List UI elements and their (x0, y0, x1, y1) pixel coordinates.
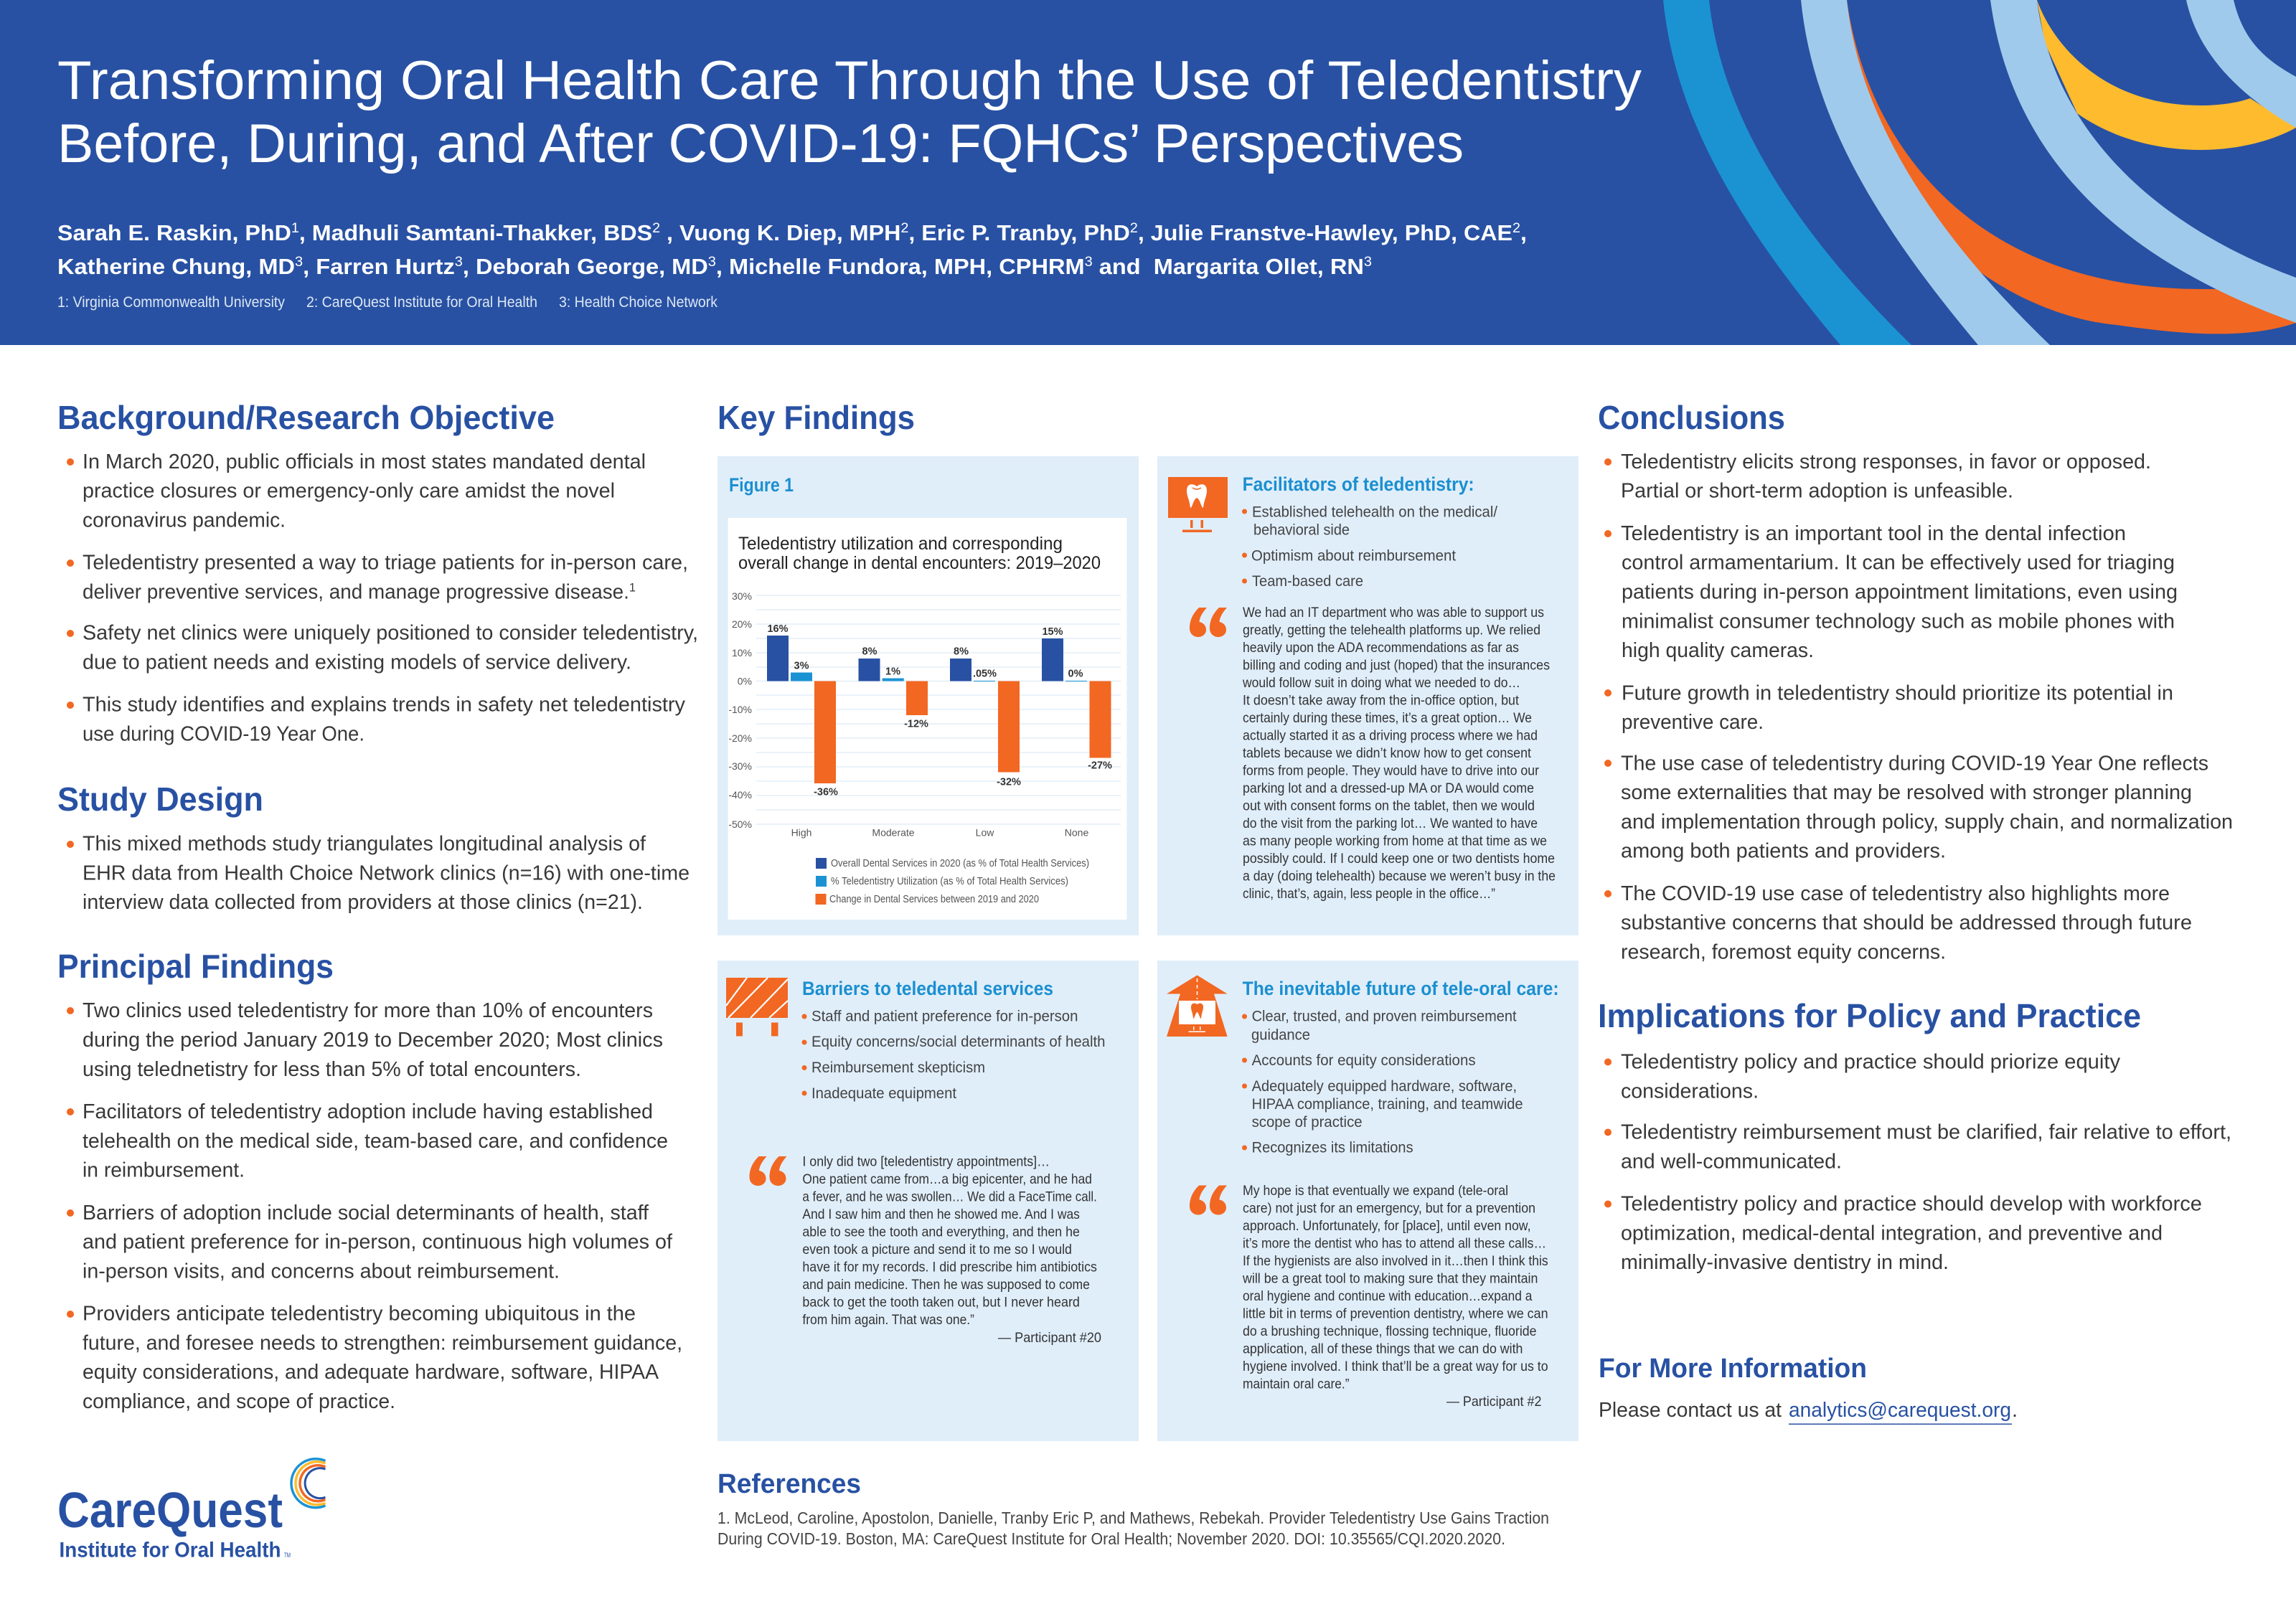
quote text: future: it’s more the dentist who has to attend all these calls… (1243, 1235, 1546, 1251)
quote text: barriers: from him again. That was one.” (802, 1312, 974, 1328)
bullet list: conclusions: Future growth in teledentistry should prioritize its potential in (1622, 681, 2173, 704)
legend: Overall Dental Services in 2020 (as % of Total Health Services) (831, 858, 1089, 869)
quote text: barriers: able to see the tooth and everything, and then he (802, 1224, 1080, 1240)
authors: 3 (1364, 255, 1372, 270)
quote text: facilitators: possibly could. If I could keep one or two dentists home (1243, 851, 1555, 867)
authors: 1 (291, 221, 299, 236)
bars: none (1042, 626, 1112, 772)
bullet list: conclusions: The COVID-19 use case of teledentistry also highlights more (1621, 882, 2170, 905)
y axis labels: -30% (728, 760, 752, 772)
bullet list: principal findings: Two clinics used teledentistry for more than 10% of encounters (83, 999, 653, 1022)
affiliations: 1: Virginia Commonwealth University (57, 294, 285, 311)
quote text: future: — Participant #2 (1446, 1394, 1541, 1410)
quote text: future: little bit in terms of prevention dentistry, where we can (1243, 1306, 1548, 1321)
bars: moderate: 8% (862, 646, 878, 657)
affiliations (57, 294, 718, 311)
section: implications (1598, 997, 2231, 1274)
section: conclusions (1598, 399, 2233, 964)
quote text: future: My hope is that eventually we expand (tele-oral (1243, 1183, 1508, 1199)
bullet list: principal findings: telehealth on the medical side, team-based care, and confidence (83, 1130, 668, 1153)
quote text: future: application, all of these things that we can do with (1243, 1341, 1523, 1357)
bars: none: -27% (1088, 760, 1112, 772)
bullet list: barriers: Inadequate equipment (811, 1085, 956, 1102)
bullet list: implications: and well-communicated. (1621, 1150, 1842, 1173)
bars: low (950, 646, 1021, 788)
bullet list: principal findings: equity considerations, and adequate hardware, software, HIPAA (83, 1361, 659, 1384)
bullet list: facilitators: behavioral side (1253, 522, 1350, 539)
quote text: future: hygiene involved. I think that’ll be a great way for us to (1243, 1359, 1548, 1374)
bullet list: facilitators: Team-based care (1252, 573, 1363, 590)
section: references (718, 1469, 1549, 1548)
bullet list: conclusions: The use case of teledentistry during COVID-19 Year One reflects (1621, 752, 2208, 775)
bullet list: barriers: Equity concerns/social determinants of health (811, 1034, 1105, 1050)
icon: quotation mark (749, 1156, 786, 1186)
affiliations: 3: Health Choice Network (559, 294, 718, 311)
quote text: facilitators: a day (doing telehealth) because we weren’t busy in the (1243, 868, 1556, 884)
logo: CareQuest: TM (284, 1552, 291, 1559)
bars: high: 3% (794, 660, 809, 671)
quote text: facilitators: do the visit from the parking lot… We wanted to have (1243, 816, 1538, 831)
legend: % Teledentistry Utilization (as % of Total Health Services) (831, 876, 1068, 887)
title: Before, During, and After COVID-19: FQHCs’ Perspectives (57, 113, 1464, 174)
bullet list: conclusions: Teledentistry is an important tool in the dental infection (1621, 522, 2126, 545)
quote text: future: will be a great tool to making sure that they maintain (1242, 1271, 1538, 1287)
section: study design (57, 780, 690, 914)
legend: Change in Dental Services between 2019 and 2020 (829, 894, 1039, 905)
bullet list: implications: considerations. (1621, 1080, 1759, 1103)
bullet list: implications: minimally-invasive dentistry in mind. (1621, 1251, 1949, 1274)
chart title: Teledentistry utilization and corresponding (738, 534, 1063, 554)
panel: figure 1 (718, 456, 1139, 935)
heading: study design: Study Design (57, 780, 263, 818)
icon: road barrier (726, 978, 788, 1036)
bullet list: principal findings: Facilitators of teledentistry adoption include having established (83, 1100, 653, 1123)
quote text: facilitators: parking lot and a dressed-up MA or DA would come (1243, 780, 1534, 796)
quote text: barriers: One patient came from…a big epicenter, and he had (802, 1171, 1092, 1187)
authors: , Vuong K. Diep, MPH (660, 220, 900, 245)
heading: key findings: Key Findings (718, 399, 915, 436)
y axis labels: 10% (732, 647, 752, 659)
logo: CareQuest: Institute for Oral Health (59, 1538, 281, 1562)
heading: barriers: Barriers to teledental services (802, 978, 1053, 999)
bullet list: background: This study identifies and explains trends in safety net teledentistry (83, 694, 685, 717)
logo: CareQuest (57, 1459, 326, 1562)
quote text: facilitators: actually started it as a driving process where we had (1243, 727, 1538, 743)
bullet list: conclusions: substantive concerns that should be addressed through future (1621, 912, 2192, 935)
quote text: barriers: — Participant #20 (998, 1330, 1101, 1346)
bullet list: principal findings: during the period January 2019 to December 2020; Most clinics (83, 1029, 663, 1052)
bullet list: background: coronavirus pandemic. (83, 509, 286, 532)
bullet list: future: Recognizes its limitations (1252, 1140, 1413, 1156)
icon: quotation mark (1190, 608, 1227, 637)
title (57, 50, 1642, 174)
bullet list: principal findings: in reimbursement. (83, 1159, 245, 1182)
y axis labels: 0% (738, 676, 752, 687)
bullet list: background: deliver preventive services, and manage progressive disease. (83, 581, 651, 604)
x axis labels: Moderate (872, 826, 915, 838)
authors: 3 (295, 255, 303, 270)
quote text: barriers: a fever, and he was swollen… We did a FaceTime call. (802, 1189, 1097, 1204)
panel: future of tele-oral care (1157, 961, 1578, 1441)
logo: CareQuest: CareQuest (57, 1482, 283, 1538)
quote text: facilitators: would follow suit in doing what we needed to do… (1242, 675, 1520, 691)
bullet list: facilitators: Established telehealth on the medical/ (1252, 504, 1497, 521)
bullet list: conclusions: preventive care. (1622, 711, 1764, 734)
bullet list: background: Safety net clinics were uniquely positioned to consider teledentistry, (83, 622, 698, 645)
authors: , Julie Franstve-Hawley, PhD, CAE (1138, 220, 1512, 245)
bullet list: future: Accounts for equity considerations (1252, 1052, 1476, 1069)
bullet list: background: practice closures or emergency-only care amidst the novel (83, 480, 615, 503)
bullet list: barriers (802, 1009, 1105, 1102)
section: background/research objective (57, 399, 698, 745)
bullet list: principal findings: compliance, and scope of practice. (83, 1390, 395, 1413)
y axis labels: 30% (732, 590, 752, 602)
authors: 3 (455, 255, 463, 270)
y axis labels: 20% (732, 618, 752, 630)
bullet list: principal findings: future, and foresee needs to strengthen: reimbursement guidance, (83, 1331, 682, 1354)
quote text: facilitators: forms from people. They would have to drive into our (1243, 763, 1539, 779)
quote text: facilitators: as many people working from home at that time as we (1243, 834, 1547, 849)
quote text: facilitators: It doesn’t take away from the in-office option, but (1243, 693, 1520, 709)
decorative arcs (1663, 0, 2296, 345)
bullet list: conclusions: Teledentistry elicits strong responses, in favor or opposed. (1621, 450, 2151, 473)
bars: high: -36% (814, 786, 838, 798)
bullet list: future: Adequately equipped hardware, software, (1252, 1078, 1517, 1095)
authors: 3 (708, 255, 716, 270)
panel: facilitators (1157, 456, 1578, 935)
y axis labels: -40% (728, 789, 752, 801)
quote text: future: If the hygienists are also involved in it…then I think this (1243, 1253, 1548, 1269)
authors: , Eric P. Tranby, PhD (908, 220, 1130, 245)
quote text: barriers (802, 1153, 1101, 1346)
quote text: facilitators: out with consent forms on the tablet, then we would (1243, 798, 1535, 813)
bullet list: conclusions: control armamentarium. It can be effectively used for triaging (1622, 552, 2175, 575)
bullet list: study design: EHR data from Health Choice Network clinics (n=16) with one-time (83, 862, 690, 884)
x axis labels: Low (976, 826, 994, 838)
bullet list: study design (67, 832, 690, 914)
chart title: overall change in dental encounters: 2019–2020 (738, 553, 1101, 573)
contact line: analytics@carequest.org (1789, 1399, 2011, 1422)
bullet list: study design: interview data collected from providers at those clinics (n=21). (83, 891, 643, 914)
bullet list: implications: Teledentistry policy and practice should develop with workforce (1621, 1192, 2202, 1215)
authors: Katherine Chung, MD (57, 254, 283, 279)
authors: , Madhuli Samtani-Thakker, BDS (299, 220, 652, 245)
bullet list: conclusions: Partial or short-term adoption is unfeasible. (1621, 480, 2013, 503)
bullet list: background: due to patient needs and existing models of service delivery. (83, 651, 631, 674)
bullet list: conclusions: research, foremost equity concerns. (1621, 941, 1946, 964)
bars: low: .05% (973, 669, 997, 680)
bars: moderate (858, 646, 928, 730)
bars: high: 16% (767, 623, 789, 635)
bullet list: conclusions (1604, 450, 2233, 964)
contact line (1599, 1399, 2018, 1425)
y axis labels: -50% (728, 818, 752, 830)
bullet list: implications: Teledentistry reimbursement must be clarified, fair relative to effort, (1621, 1120, 2231, 1143)
bullet list: principal findings: and patient preference for in-person, continuous high volumes of (83, 1231, 673, 1254)
quote text: barriers: back to get the tooth taken out, but I never heard (802, 1294, 1080, 1310)
quote text: future: approach. Unfortunately, for [place], until even now, (1243, 1218, 1531, 1234)
bullet list: future: guidance (1251, 1027, 1310, 1043)
bars: high (767, 623, 838, 798)
heading: facilitators: Facilitators of teledentistry: (1243, 473, 1474, 495)
bullet list: background: Teledentistry presented a way to triage patients for in-person care, (83, 552, 688, 575)
reference text (718, 1509, 1549, 1548)
authors: and Margarita Ollet, RN (1093, 254, 1364, 279)
bullet list: background: In March 2020, public officials in most states mandated dental (83, 450, 646, 473)
contact line: Please contact us at (1599, 1399, 1782, 1422)
reference text: 1. McLeod, Caroline, Apostolon, Danielle, Tranby Eric P, and Mathews, Rebekah. Provider Teledentistry Use Gains Traction (718, 1509, 1549, 1527)
authors: , (1520, 220, 1527, 245)
y axis labels (728, 590, 752, 830)
bullet list: conclusions: minimalist consumer technology such as mobile phones with (1622, 610, 2175, 633)
bullet list: conclusions: some externalities that may be resolved with stronger planning (1621, 781, 2192, 804)
quote text: barriers: and pain medicine. Then he was supposed to come (802, 1277, 1090, 1293)
contact line: . (2012, 1399, 2018, 1422)
bullet list: future (1242, 1009, 1523, 1156)
figure label: Figure 1 (729, 474, 794, 496)
bars: none: 15% (1042, 626, 1063, 638)
bullet list: conclusions: patients during in-person appointment limitations, even using (1622, 581, 2178, 604)
bullet list: principal findings: using telednetistry for less than 5% of total encounters. (83, 1058, 581, 1081)
affiliations: 2: CareQuest Institute for Oral Health (306, 294, 537, 311)
bullet list: facilitators: Optimism about reimbursement (1251, 548, 1456, 564)
bullet list: implications: Teledentistry policy and practice should priorize equity (1621, 1051, 2121, 1074)
legend (815, 858, 1089, 905)
bullet list: background (67, 450, 698, 745)
bullet list: conclusions: and implementation through policy, supply chain, and normalization (1621, 811, 2233, 834)
quote text: facilitators: heavily upon the ADA recommendations as far as (1243, 640, 1519, 656)
quote text: facilitators: We had an IT department who was able to support us (1243, 605, 1544, 620)
heading: implications: Implications for Policy and Practice (1598, 997, 2141, 1034)
bullet list: study design: This mixed methods study triangulates longitudinal analysis of (83, 832, 646, 855)
authors: 2 (1512, 221, 1520, 236)
quote text: barriers: And I saw him and then he showed me. And I was (802, 1207, 1080, 1222)
quote text: facilitators: billing and coding and just (hoped) that the insurances (1243, 657, 1550, 673)
bullet list: principal findings: in-person visits, and concerns about reimbursement. (83, 1260, 560, 1283)
icon: quotation mark (1190, 1185, 1227, 1215)
bullet list: principal findings: Providers anticipate teledentistry becoming ubiquitous in the (83, 1303, 636, 1326)
x axis labels: None (1065, 826, 1088, 838)
bullet list: background: use during COVID-19 Year One. (83, 722, 364, 745)
heading: references: References (718, 1469, 861, 1499)
reference text: During COVID-19. Boston, MA: CareQuest Institute for Oral Health; November 2020. DOI: 10.35565/CQI.2020.2020. (718, 1529, 1505, 1548)
bars: none: 0% (1068, 669, 1083, 680)
quote text: future: care) not just for an emergency, but for a prevention (1243, 1201, 1535, 1217)
section: for more information (1599, 1354, 2018, 1425)
heading: for more information: For More Information (1599, 1354, 1867, 1384)
authors: , Farren Hurtz (303, 254, 455, 279)
bars: moderate: -12% (904, 719, 928, 730)
bullet list: implications (1604, 1051, 2231, 1274)
bullet list: future: scope of practice (1252, 1114, 1363, 1131)
quote text: facilitators: certainly during these times, it’s a great option… We (1243, 710, 1532, 726)
bars: moderate: 1% (885, 666, 900, 677)
bullet list: future: Clear, trusted, and proven reimbursement (1252, 1009, 1517, 1025)
bullet list: facilitators (1242, 504, 1497, 590)
quote text: future: maintain oral care.” (1243, 1376, 1349, 1392)
quote text: facilitators: clinic, that’s, again, less people in the office…” (1243, 886, 1495, 902)
authors: , Michelle Fundora, MPH, CPHRM (716, 254, 1085, 279)
chart title (738, 534, 1101, 573)
quote text: future: do a brushing technique, flossing technique, fluoride (1243, 1323, 1537, 1339)
x axis labels (791, 826, 1088, 838)
bullet list: principal findings (67, 999, 682, 1413)
header banner (0, 0, 2296, 345)
authors: 2 (652, 221, 660, 236)
bullet list: background: 1 (629, 581, 636, 594)
quote text: facilitators: greatly, getting the telehealth platforms up. We relied (1243, 623, 1540, 638)
bullet list: principal findings: Barriers of adoption include social determinants of health, staff (83, 1202, 649, 1224)
bullet list: future: HIPAA compliance, training, and teamwide (1252, 1096, 1523, 1113)
bar chart (728, 518, 1126, 920)
y axis labels: -20% (728, 732, 752, 744)
bullet list: implications: optimization, medical-dental integration, and preventive and (1621, 1222, 2163, 1245)
y axis labels: -10% (728, 704, 752, 715)
authors: 3 (1085, 255, 1093, 270)
icon: upward arrow with monitor (1167, 976, 1228, 1037)
icon: monitor with tooth (1168, 477, 1228, 532)
panel: barriers (718, 961, 1139, 1441)
quote text: barriers: even took a picture and send it to me so I would (802, 1242, 1072, 1257)
authors: Sarah E. Raskin, PhD (57, 220, 283, 245)
quote text: future (1242, 1183, 1548, 1410)
x axis labels: High (791, 826, 811, 838)
authors: 2 (900, 221, 908, 236)
section: principal findings (57, 948, 682, 1413)
heading: background: Background/Research Objective (57, 399, 555, 436)
heading: future: The inevitable future of tele-oral care: (1243, 978, 1559, 999)
quote text: barriers: have it for my records. I did prescribe him antibiotics (802, 1259, 1097, 1275)
quote text: facilitators (1242, 605, 1556, 902)
quote text: future: oral hygiene and continue with education…expand a (1243, 1288, 1533, 1304)
authors (57, 220, 1527, 279)
bullet list: conclusions: high quality cameras. (1622, 639, 1814, 662)
quote text: facilitators: tablets because we didn’t know how to get consent (1243, 745, 1532, 761)
quote text: barriers: I only did two [teledentistry appointments]… (802, 1153, 1050, 1169)
bars: low: -32% (997, 776, 1021, 788)
title: Transforming Oral Health Care Through the Use of Teledentistry (57, 50, 1642, 111)
bullet list: barriers: Reimbursement skepticism (811, 1060, 985, 1076)
heading: conclusions: Conclusions (1598, 399, 1785, 436)
bullet list: barriers: Staff and patient preference for in-person (811, 1009, 1078, 1025)
authors: , Deborah George, MD (463, 254, 708, 279)
bars: low: 8% (954, 646, 969, 657)
heading: principal findings: Principal Findings (57, 948, 334, 985)
bullet list: conclusions: among both patients and providers. (1621, 840, 1946, 863)
authors: 2 (1130, 221, 1138, 236)
